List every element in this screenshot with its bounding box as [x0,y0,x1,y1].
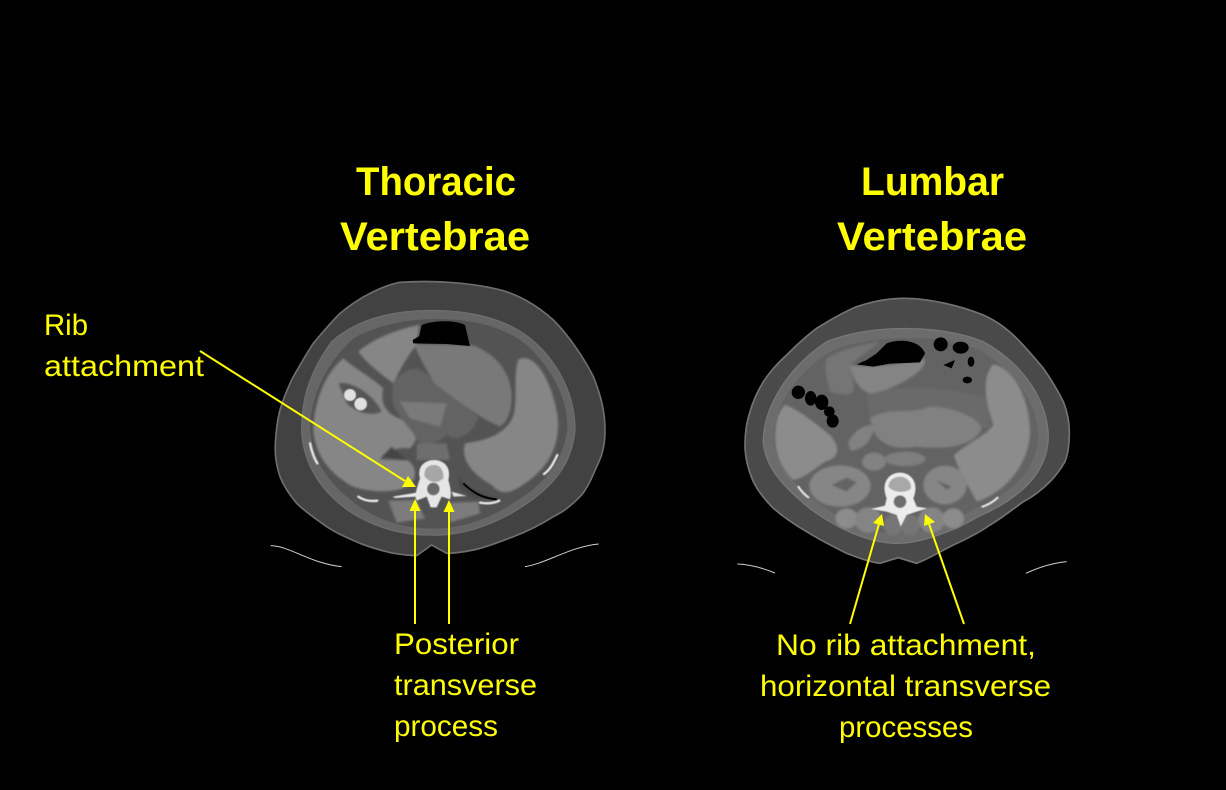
body wall [302,311,575,535]
spleen [464,358,558,492]
colon gas: right of image [934,337,974,383]
body wall [763,329,1048,543]
colon gas: left of image [792,386,839,428]
stomach [414,344,512,427]
label: posterior transverse process: Posterior [394,628,519,661]
arrow: rib attachment [200,351,416,487]
label: no rib attachment: horizontal transverse [760,670,1051,703]
CT scan: thoracic level [271,281,605,567]
heading: lumbar vertebrae: Lumbar [861,160,1004,204]
paraspinal muscles [388,500,425,523]
stomach gas [857,341,925,367]
descending bowel [954,364,1030,502]
label: no rib attachment [760,629,1051,744]
gas bubble [413,321,470,346]
label: no rib attachment: processes [839,711,973,744]
label: no rib attachment: No rib attachment, [776,629,1036,662]
bright gallbladder stones [344,389,367,410]
kidney right of image [923,466,967,504]
bright rib segments [310,443,557,503]
label: posterior transverse process [394,628,537,743]
kidney left of image [809,465,871,507]
omentum [867,388,990,428]
CT scan: lumbar level [737,298,1069,573]
skin folds [737,562,1067,573]
heading: thoracic vertebrae: Vertebrae [340,215,530,259]
aorta and cava [862,453,886,471]
back muscles [835,508,858,528]
label: posterior transverse process: transverse [394,669,537,702]
stomach [850,359,925,394]
label: rib attachment [44,309,205,383]
heading: lumbar vertebrae [837,160,1027,259]
arrow: lumbar transverse process right [924,514,964,624]
heading: lumbar vertebrae: Vertebrae [837,215,1027,259]
small bowel loops [870,407,982,448]
vertebra [393,460,467,507]
arrow: thoracic transverse process right [444,500,454,624]
heading: thoracic vertebrae [340,160,530,259]
label: rib attachment: attachment [44,350,205,383]
arrow: thoracic transverse process left [410,499,420,624]
label: posterior transverse process: process [394,710,498,743]
central mesentery and pancreas [392,369,478,444]
skin folds [271,544,599,567]
label: rib attachment: Rib [44,309,88,342]
heading: thoracic vertebrae: Thoracic [356,160,516,204]
vertebra [871,473,927,527]
liver [313,358,417,491]
arrow: lumbar transverse process left [850,514,884,624]
liver tip [775,405,837,480]
bright rib tips [798,487,998,507]
